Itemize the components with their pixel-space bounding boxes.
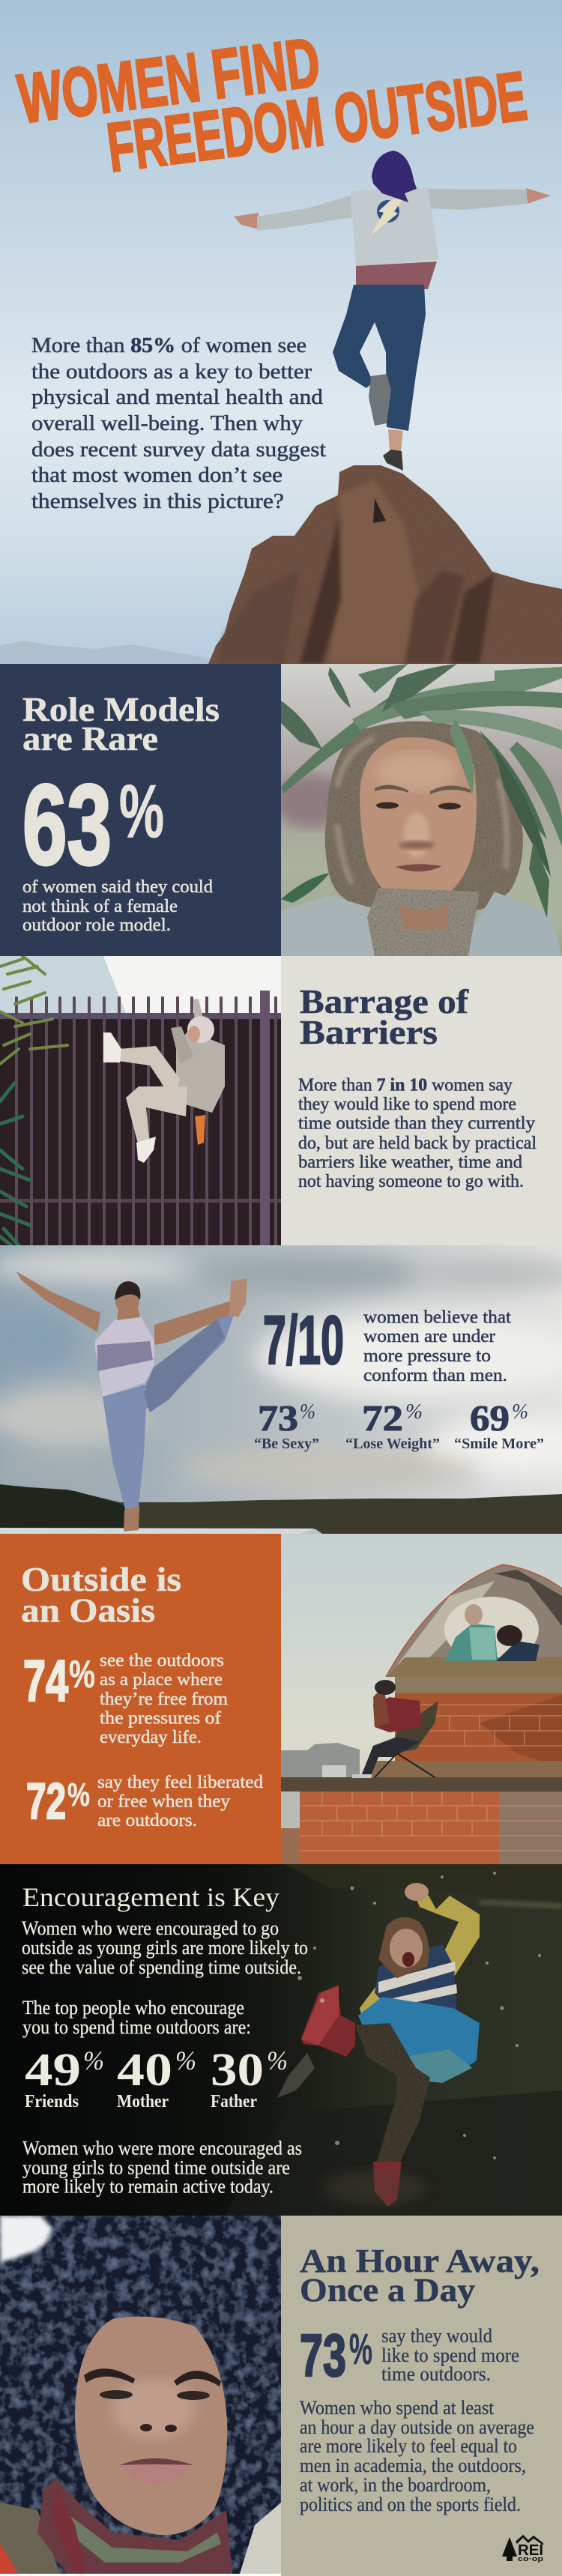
stat: lose weight: %	[405, 1400, 423, 1424]
description: of women said they could	[22, 877, 213, 897]
heading: Once a Day	[300, 2272, 475, 2309]
stat: mother: 40	[117, 2045, 172, 2096]
photo: woman in yoga pose	[16, 1272, 247, 1532]
city buildings	[281, 1743, 360, 1777]
hair	[325, 721, 523, 910]
leaves	[281, 664, 562, 918]
heading	[300, 2243, 540, 2309]
heading: Barriers	[300, 1014, 438, 1051]
paragraph	[298, 1076, 537, 1191]
stat: 74%: %	[69, 1653, 95, 1696]
panel: pressure to conform	[0, 1245, 562, 1534]
plants	[0, 956, 67, 1245]
tent	[386, 1564, 562, 1677]
paragraph: remain active	[22, 2137, 302, 2198]
text: free from pressures: see the outdoors	[100, 1651, 224, 1671]
stat: father: %	[267, 2046, 288, 2075]
face	[360, 737, 477, 891]
photo: rock summit	[208, 465, 562, 664]
paragraph: remain active: young girls to spend time outside are	[22, 2156, 290, 2179]
description: outdoor role model.	[22, 916, 171, 935]
intro text	[31, 334, 326, 513]
paragraph: an hour a day outside on average	[300, 2416, 534, 2438]
photo: older woman with leaf crown	[274, 664, 562, 956]
heading: Encouragement is Key	[22, 1882, 280, 1912]
stat: 72%: %	[67, 1777, 90, 1813]
stat: 72%: 72	[26, 1773, 66, 1830]
intro text: themselves in this picture?	[31, 490, 284, 513]
logo: REI co-op	[502, 2535, 544, 2563]
description: more pressure to	[363, 1346, 491, 1366]
face	[75, 2317, 227, 2535]
stat: smile more: 69	[470, 1397, 510, 1439]
paragraph: at work, in the boardroom,	[300, 2473, 491, 2496]
text: free from pressures: the pressures of	[100, 1708, 221, 1728]
intro text: More than 85% of women see	[31, 334, 306, 357]
stat: father: Father	[211, 2092, 257, 2111]
stat: be sexy: 73	[258, 1397, 298, 1439]
paragraph: barriers like weather, time and	[298, 1152, 522, 1172]
paragraph: value of time outside: Women who were encouraged to go	[22, 1917, 279, 1939]
fence bars	[15, 991, 277, 1245]
photo: woman climbing fence	[0, 956, 281, 1245]
panel: barriers	[281, 956, 562, 1245]
stat: be sexy: %	[300, 1400, 315, 1424]
stat: be sexy	[255, 1404, 319, 1452]
stat: 73%: %	[349, 2325, 372, 2374]
paragraph: are more likely to feel equal to	[300, 2434, 517, 2457]
logo: REI co-op: co·op	[518, 2555, 544, 2563]
intro text: overall well-being. Then why	[31, 412, 303, 435]
distant shoreline	[285, 1864, 562, 1903]
stat: 63%: %	[119, 770, 164, 853]
stat: friends	[25, 2052, 103, 2107]
description: conform than men.	[363, 1366, 507, 1385]
paragraph: not having someone to go with.	[298, 1172, 524, 1191]
stat: smile more	[455, 1404, 543, 1448]
text: liberated	[97, 1773, 263, 1830]
stat: lose weight: “Lose Weight”	[345, 1436, 440, 1452]
person in camp chair	[352, 1680, 438, 1778]
photo: girl splashing	[277, 1883, 480, 2207]
heading	[300, 983, 469, 1051]
stat: friends: Friends	[25, 2092, 79, 2111]
heading: Outside is	[21, 1561, 181, 1598]
heading	[21, 1561, 181, 1629]
panel: encouragement is key	[0, 1864, 562, 2216]
photo: smiling woman with curly hair	[0, 2216, 281, 2576]
brick walls	[395, 1677, 562, 1695]
text: spend more time: time outdoors.	[381, 2362, 491, 2385]
text: liberated: are outdoors.	[97, 1811, 197, 1830]
stat: be sexy: “Be Sexy”	[254, 1436, 319, 1452]
logo: REI co-op: REI	[518, 2542, 543, 2559]
paragraph: they would like to spend more	[298, 1095, 516, 1114]
stat: lose weight: 72	[362, 1397, 403, 1439]
panel: role models	[0, 664, 281, 956]
paragraph: value of time outside	[22, 1917, 308, 1978]
heading: Role Models	[22, 691, 220, 728]
stat: father: 30	[211, 2045, 264, 2096]
paragraph: remain active: more likely to remain active today.	[22, 2175, 274, 2198]
photo: woman balancing	[234, 151, 551, 471]
paragraph: top people	[22, 1996, 251, 2038]
paragraph: time outside than they currently	[298, 1113, 535, 1133]
description: women are under	[363, 1327, 495, 1346]
description	[363, 1308, 511, 1385]
description: women believe that	[363, 1308, 511, 1328]
photo: rooftop tent on brick building	[281, 1534, 562, 1864]
text: free from pressures: everyday life.	[100, 1728, 202, 1747]
text: liberated: or free when they	[97, 1792, 230, 1812]
paragraph: politics and on the sports field.	[300, 2493, 521, 2515]
panel: an hour away	[281, 2216, 562, 2576]
intro text: the outdoors as a key to better	[31, 360, 312, 384]
stat: mother	[117, 2052, 195, 2107]
paragraph	[300, 2396, 534, 2515]
intro text: does recent survey data suggest	[31, 438, 326, 462]
stat: father	[211, 2052, 286, 2107]
distant mountains	[0, 641, 214, 664]
heading	[22, 691, 220, 758]
stat: friends: %	[83, 2046, 104, 2075]
stat: 73%: 73	[300, 2322, 346, 2389]
paragraph: Women who spend at least	[300, 2396, 495, 2419]
stat: smile more: %	[512, 1400, 528, 1424]
paragraph: remain active: Women who were more encouraged as	[22, 2137, 302, 2159]
intro text: physical and mental health and	[31, 386, 323, 409]
panel: hero	[0, 0, 562, 664]
paragraph: top people: you to spend time outdoors are:	[22, 2016, 251, 2038]
stat: 74%: 74	[23, 1648, 68, 1714]
title: WOMEN FIND	[14, 24, 324, 138]
stat: 63%: 63	[22, 761, 112, 889]
text: spend more time	[381, 2324, 519, 2385]
intro text: that most women don’t see	[31, 464, 282, 487]
panel: outside is an oasis	[0, 1534, 281, 1864]
brick mortar	[300, 1705, 562, 1851]
paragraph: More than 7 in 10 women say	[298, 1076, 513, 1095]
heading: an Oasis	[21, 1591, 155, 1629]
description	[22, 877, 213, 935]
scarf	[37, 2479, 232, 2574]
text: free from pressures: as a place where	[100, 1670, 223, 1690]
water droplets	[297, 1872, 541, 2159]
stat: smile more: “Smile More”	[454, 1436, 544, 1452]
text: liberated: say they feel liberated	[97, 1773, 263, 1792]
treeline	[0, 1484, 562, 1530]
heading: Barrage of	[300, 983, 469, 1021]
text: spend more time: like to spend more	[381, 2344, 519, 2366]
text: free from pressures: they’re free from	[100, 1690, 228, 1709]
paragraph: do, but are held back by practical	[298, 1134, 537, 1153]
paragraph: value of time outside: see the value of spending time outside.	[22, 1956, 301, 1978]
text: free from pressures	[100, 1651, 228, 1747]
description: not think of a female	[22, 897, 178, 916]
jacket and scarf	[281, 895, 375, 956]
paragraph: top people: The top people who encourage	[22, 1996, 244, 2019]
text: spend more time: say they would	[381, 2324, 492, 2347]
heading: are Rare	[22, 720, 158, 758]
climber	[103, 999, 225, 1163]
title	[15, 39, 528, 172]
stat: friends: 49	[25, 2045, 81, 2096]
stat: 7/10: 7/10	[263, 1302, 344, 1379]
stat: mother: %	[175, 2046, 196, 2075]
paragraph: value of time outside: outside as young girls are more likely to	[22, 1936, 308, 1959]
paragraph: men in academia, the outdoors,	[300, 2454, 526, 2476]
stat: mother: Mother	[117, 2092, 169, 2111]
heading: An Hour Away,	[300, 2243, 540, 2279]
stat: lose weight	[346, 1404, 439, 1452]
